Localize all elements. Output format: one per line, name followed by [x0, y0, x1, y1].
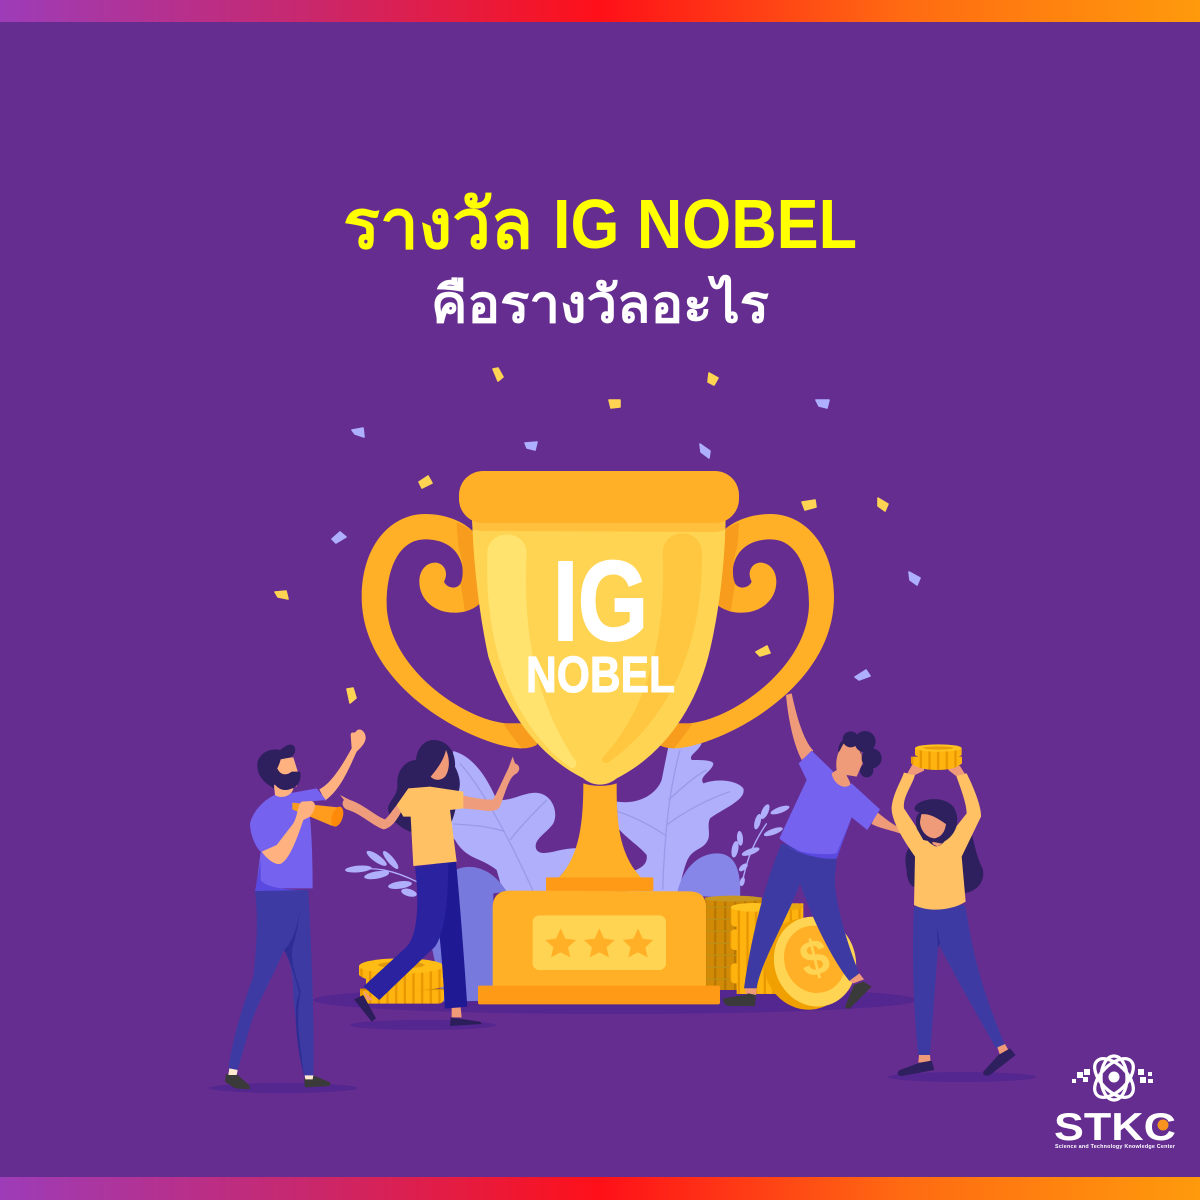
logo orange dot [1158, 1120, 1168, 1130]
stars [545, 928, 653, 957]
right leaf [617, 743, 744, 892]
back hair [905, 833, 983, 893]
hair [838, 731, 882, 777]
shoes and ankles [723, 973, 872, 1009]
woman shoes and ankles [354, 991, 482, 1026]
title line 1 Latin: IG NOBEL [553, 185, 857, 263]
shirt shade [782, 817, 852, 859]
cup shade [602, 533, 702, 763]
face [431, 750, 449, 780]
dark back stack [705, 896, 762, 990]
person: man with megaphone [225, 730, 366, 1089]
left arm [340, 795, 403, 829]
person: woman pointing [340, 740, 519, 1026]
front arm [262, 801, 315, 864]
trophy rim [459, 471, 739, 523]
trousers [913, 905, 1005, 1055]
trophy [362, 471, 834, 785]
plaque [533, 915, 666, 970]
shirt hem [255, 860, 313, 891]
face [272, 757, 298, 787]
bottom gradient bar [0, 1177, 1200, 1200]
logo tagline: Science and Technology Knowledge Center [1055, 1144, 1176, 1150]
logo STKC [1054, 1052, 1176, 1150]
ankles [918, 1044, 1008, 1063]
title line 2: คือรางวัลอะไร [431, 274, 769, 334]
right blob [677, 853, 740, 898]
trouser fold [284, 907, 304, 1076]
trophy cup [472, 517, 726, 785]
trousers [744, 843, 859, 988]
raised arm [319, 730, 366, 801]
trophy stem and base [478, 783, 720, 1004]
trousers [228, 890, 314, 1076]
base foot [478, 986, 720, 1004]
hair behind head [914, 799, 957, 843]
neck [932, 837, 942, 847]
back leg [433, 862, 467, 1009]
left blob [432, 867, 507, 1002]
large dollar coin [752, 906, 868, 1021]
cup band [472, 518, 726, 532]
collar [546, 877, 653, 891]
trophy text IG: IG [553, 538, 648, 664]
neck [274, 785, 293, 797]
coins held [911, 744, 962, 770]
front stack [730, 903, 803, 994]
right handle [656, 514, 834, 748]
stem [558, 783, 642, 878]
left leaf veins [453, 763, 577, 892]
hands [907, 763, 965, 776]
coin stack left [359, 958, 444, 1004]
ankles [228, 1068, 313, 1079]
shirt [250, 788, 326, 888]
coin stacks right [705, 896, 868, 1021]
back hair [388, 740, 460, 832]
top gradient bar [0, 0, 1200, 22]
shirt [397, 787, 463, 866]
person: woman holding coins [892, 744, 1016, 1076]
trophy text NOBEL: NOBEL [526, 646, 675, 703]
megaphone [292, 803, 346, 828]
title line 1 Thai: รางวัล [343, 187, 533, 263]
shirt [779, 751, 880, 859]
right sprig [730, 803, 790, 887]
raised arm [786, 693, 813, 760]
person: man reaching up [723, 693, 907, 1009]
confetti [275, 368, 920, 703]
front leg [363, 863, 448, 1000]
base block [493, 891, 706, 987]
logo wordmark: STKC [1054, 1106, 1176, 1149]
left sprig [345, 848, 418, 898]
background plants [345, 743, 790, 1002]
cup highlight [487, 535, 576, 768]
left handle [362, 514, 540, 748]
beard [273, 768, 301, 790]
hair [257, 745, 295, 788]
shirt and sleeves [892, 773, 981, 910]
title [343, 185, 857, 334]
shoes [898, 1048, 1016, 1076]
logo atom icon [1088, 1052, 1140, 1104]
ground shadows [209, 986, 1036, 1093]
side arm [872, 812, 907, 833]
right leaf veins [618, 750, 730, 890]
right arm [463, 757, 519, 811]
face [920, 814, 946, 838]
dollar sign: $ [794, 927, 835, 989]
neck and head [832, 743, 864, 787]
left leaf [440, 751, 582, 893]
trouser fold [937, 927, 940, 948]
shoes [225, 1074, 331, 1089]
logo dots [1072, 1069, 1153, 1083]
